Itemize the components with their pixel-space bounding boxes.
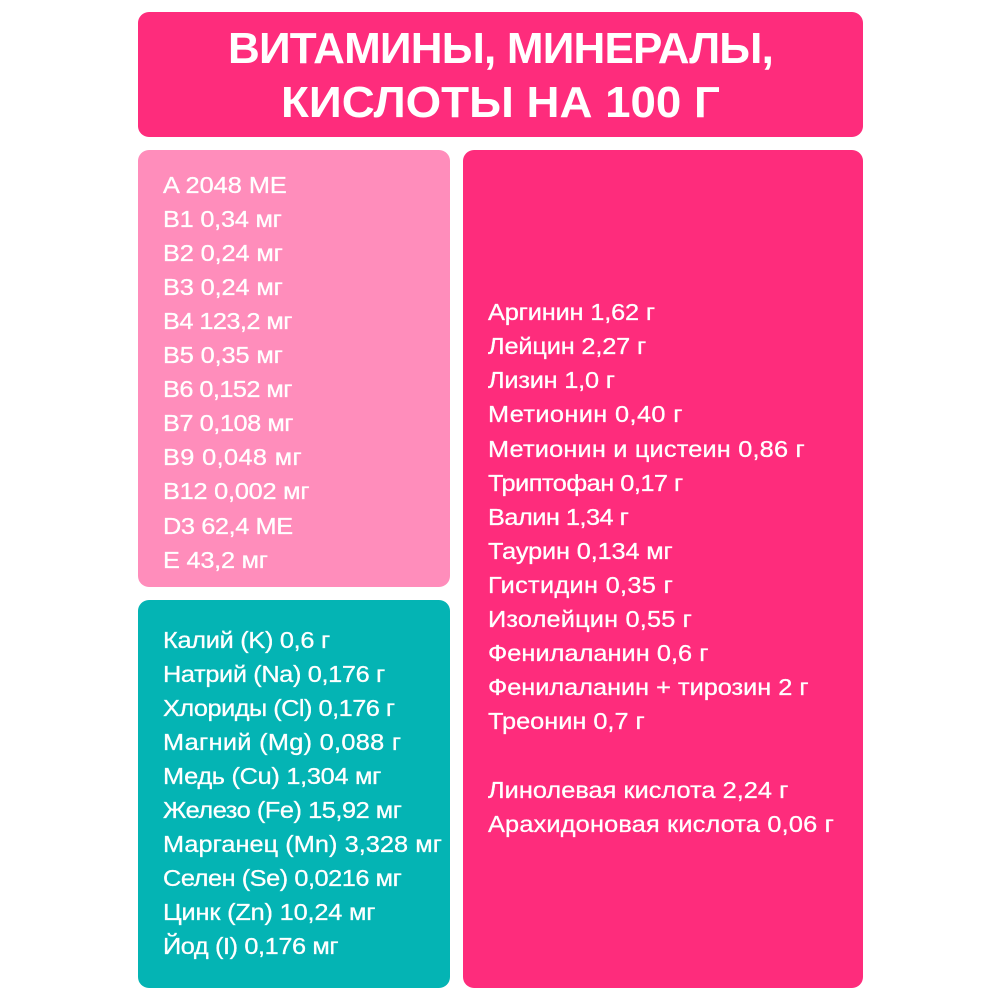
panel: amino and fatty acids: Гистидин 0,35 г [488, 572, 673, 598]
panel: vitamins: A 2048 МЕ [163, 172, 287, 198]
panel: amino and fatty acids: Аргинин 1,62 г [488, 299, 655, 325]
panel: minerals [138, 600, 450, 988]
panel: amino and fatty acids: Линолевая кислота 2,24 г [488, 777, 788, 803]
panel: vitamins: B7 0,108 мг [163, 410, 293, 436]
panel: minerals: Марганец (Mn) 3,328 мг [163, 831, 442, 857]
panel: minerals: Цинк (Zn) 10,24 мг [163, 899, 375, 925]
panel: minerals: Хлориды (Cl) 0,176 г [163, 695, 395, 721]
panel: vitamins: B6 0,152 мг [163, 376, 292, 402]
panel: amino and fatty acids: Фенилаланин + тирозин 2 г [488, 674, 809, 700]
panel: minerals: Калий (K) 0,6 г [163, 627, 330, 653]
panel: amino and fatty acids: Валин 1,34 г [488, 504, 628, 530]
panel: vitamins: D3 62,4 МЕ [163, 513, 293, 539]
panel: amino and fatty acids: Метионин и цистеин 0,86 г [488, 436, 805, 462]
panel: minerals: Медь (Cu) 1,304 мг [163, 763, 381, 789]
panel: vitamins: B4 123,2 мг [163, 308, 292, 334]
panel: vitamins: B1 0,34 мг [163, 206, 282, 232]
panel: amino and fatty acids: Изолейцин 0,55 г [488, 606, 692, 632]
panel: amino and fatty acids: Триптофан 0,17 г [488, 470, 683, 496]
panel: amino and fatty acids: Лейцин 2,27 г [488, 333, 646, 359]
panel: minerals: Йод (I) 0,176 мг [163, 933, 338, 959]
panel: vitamins: B12 0,002 мг [163, 478, 309, 504]
panel: vitamins: E 43,2 мг [163, 547, 268, 573]
panel: vitamins: B5 0,35 мг [163, 342, 283, 368]
panel: amino and fatty acids [463, 150, 863, 988]
title line 1: ВИТАМИНЫ, МИНЕРАЛЫ, [228, 24, 773, 73]
panel: vitamins [138, 150, 450, 587]
title banner [138, 12, 863, 137]
panel: minerals: Магний (Mg) 0,088 г [163, 729, 401, 755]
panel: vitamins: B3 0,24 мг [163, 274, 283, 300]
panel: vitamins: B2 0,24 мг [163, 240, 283, 266]
panel: amino and fatty acids: Метионин 0,40 г [488, 401, 683, 427]
panel: minerals: Натрий (Na) 0,176 г [163, 661, 385, 687]
panel: minerals: Селен (Se) 0,0216 мг [163, 865, 401, 891]
panel: amino and fatty acids: Таурин 0,134 мг [488, 538, 673, 564]
panel: amino and fatty acids: Фенилаланин 0,6 г [488, 640, 709, 666]
panel: minerals: Железо (Fe) 15,92 мг [163, 797, 402, 823]
panel: amino and fatty acids: Лизин 1,0 г [488, 367, 615, 393]
title line 2: КИСЛОТЫ НА 100 Г [281, 78, 720, 127]
panel: vitamins: B9 0,048 мг [163, 444, 302, 470]
panel: amino and fatty acids: Арахидоновая кислота 0,06 г [488, 811, 834, 837]
panel: amino and fatty acids: Треонин 0,7 г [488, 708, 645, 734]
